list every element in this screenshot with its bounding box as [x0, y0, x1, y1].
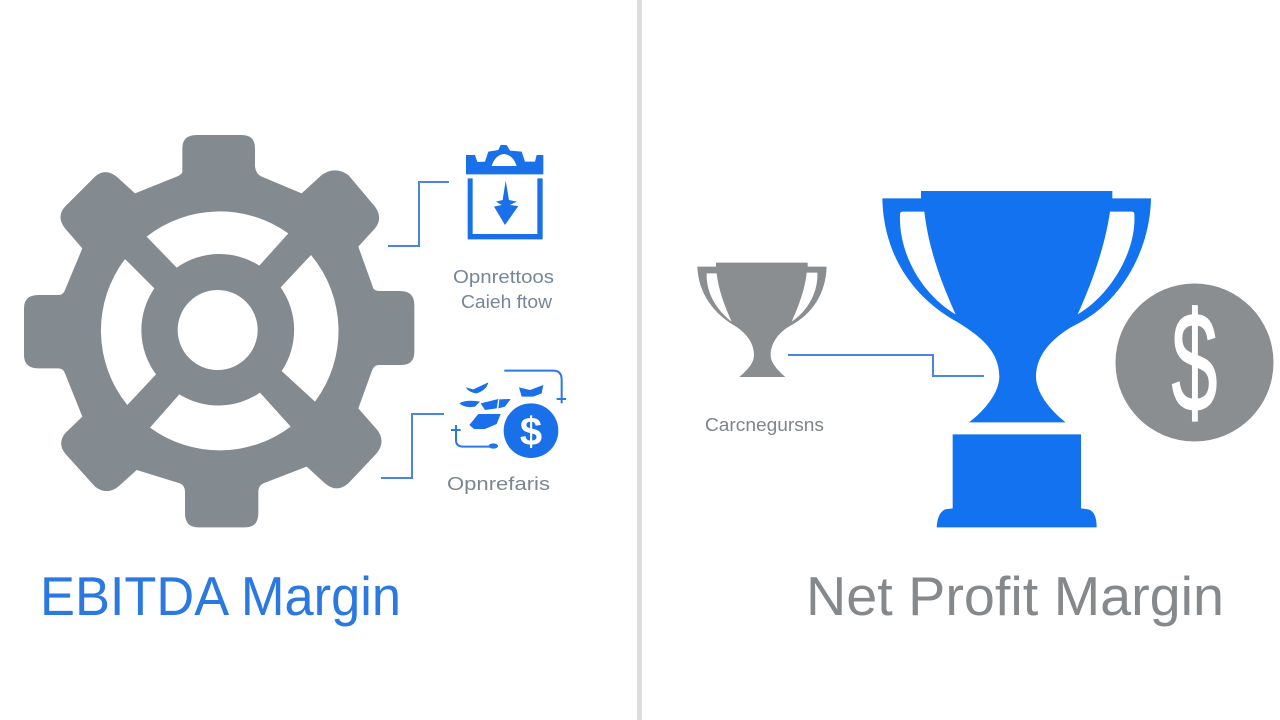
- label: operations profits: Opnrefaris: [447, 474, 550, 494]
- title: Net Profit Margin: Net Profit Margin: [806, 565, 1224, 627]
- connector: small trophy to large trophy: [788, 355, 984, 376]
- icon: gray dollar circle: [1116, 283, 1274, 442]
- label: operations cash flow: Opnrettoos: [453, 267, 554, 287]
- icon: gray dollar circle: $: [1172, 283, 1218, 442]
- icon: small gray trophy: [697, 263, 827, 377]
- label: operations cash flow: [453, 267, 554, 312]
- label: operations cash flow: Caieh ftow: [461, 292, 553, 312]
- icon glyph: dollar sign: $: [520, 410, 542, 454]
- connector: gear to operations icon: [388, 182, 449, 246]
- icon: blue coins and dollar badge: [451, 371, 566, 458]
- connector: gear to operations money icon: [381, 414, 444, 478]
- label: carcnegursns: Carcnegursns: [705, 415, 824, 435]
- icon: large blue trophy: [882, 191, 1151, 527]
- icon: blue box with crown and arrow: [466, 145, 543, 239]
- title: EBITDA Margin: EBITDA Margin: [40, 565, 401, 627]
- icon: large gray gear: [24, 135, 414, 527]
